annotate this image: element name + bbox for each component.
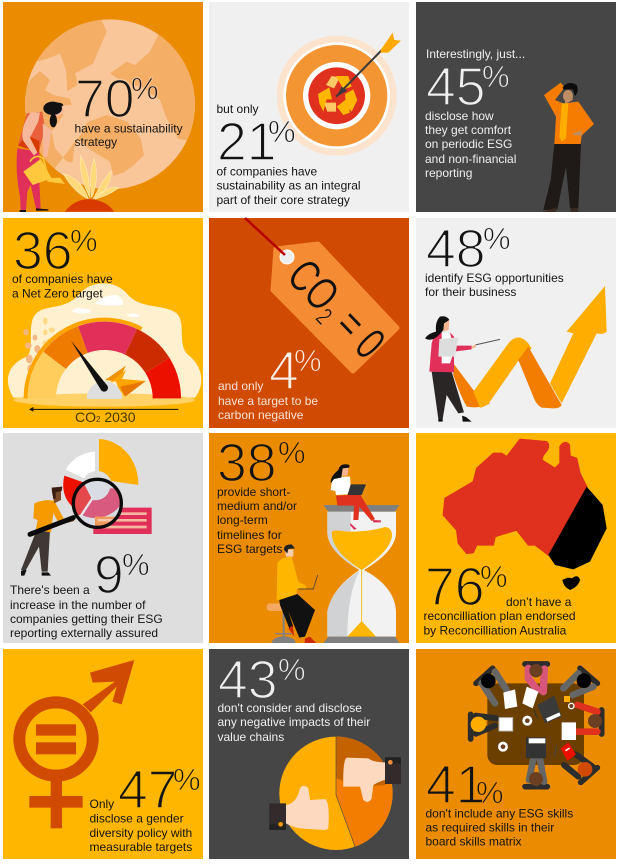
text: don't have a reconciliation plan endorsed: don’t have a <box>506 595 572 609</box>
text: ESG skills in board skills matrix: as required skills in their <box>426 820 554 834</box>
text: and only have a target to be carbon negative: and only <box>218 379 263 393</box>
illustration: globe <box>17 17 200 189</box>
panel: 41% board skills <box>416 649 616 859</box>
text: but only: but only <box>216 102 259 116</box>
stat: 9%: 9 <box>94 546 124 605</box>
text: timelines for ESG targets: medium and/or <box>217 499 297 513</box>
stat: 48%: 48 <box>426 220 486 279</box>
panel background <box>209 433 409 643</box>
stat: 21%: % <box>268 114 296 149</box>
stat: 76%: 76 <box>425 558 485 617</box>
text: of companies have sustainability as an integral part of their core strategy: sustainability as an integral <box>216 178 361 192</box>
panel: 38% timelines <box>209 433 409 643</box>
text: only disclose gender diversity policy: Only <box>90 797 114 811</box>
stat: 43%: 43 <box>218 651 278 710</box>
text: disclose how they get comfort: reporting <box>425 166 472 180</box>
panel: 21% core strategy <box>209 2 409 212</box>
stat: 48%: % <box>483 221 511 256</box>
text: disclose how they get comfort: disclose how <box>425 109 494 123</box>
text: ESG skills in board skills matrix: board skills matrix <box>426 834 522 848</box>
illustration: CO2 = 0 tag <box>245 218 397 371</box>
panel background <box>3 433 203 643</box>
stat: 4%: 4 <box>269 342 299 401</box>
panel background <box>209 218 409 428</box>
panel: 36% net zero target <box>3 218 203 428</box>
text: disclose how they get comfort: and non-financial <box>425 152 516 166</box>
text: only disclose gender diversity policy <box>90 797 192 854</box>
text: disclose how they get comfort: they get comfort <box>425 123 512 137</box>
text: timelines for ESG targets: timelines for <box>217 528 282 542</box>
icon: gender equality symbol <box>19 660 134 828</box>
stat: 21%: 21 <box>217 113 277 172</box>
panel background <box>416 2 616 212</box>
text: increase in companies getting assurance: There's been a <box>10 583 90 597</box>
illustration: CO2 gauge <box>8 283 201 412</box>
text: have a sustainability strategy: have a sustainability <box>74 122 183 136</box>
panel background <box>416 433 616 643</box>
illustration: target with recycle icon and arrow <box>277 33 401 156</box>
stat: 76%: % <box>480 559 508 594</box>
panel background <box>209 2 409 212</box>
stat: 4%: % <box>294 343 322 378</box>
text: of companies have a Net Zero target: a Net Zero target <box>12 286 103 300</box>
text: increase in companies getting assurance <box>10 583 163 640</box>
panel: 45% disclose comfort <box>416 2 616 212</box>
panel: 9% externally assured <box>3 433 203 643</box>
text: identify ESG opportunities: for their business <box>425 285 516 299</box>
text: and only have a target to be carbon negative: carbon negative <box>218 408 304 422</box>
text: increase in companies getting assurance: companies getting their ESG <box>10 612 163 626</box>
stat: 38%: % <box>278 435 306 470</box>
text: disclose how they get comfort <box>425 109 516 180</box>
panel: 43% negative impacts <box>209 649 409 859</box>
text: identify ESG opportunities: identify ESG opportunities <box>425 271 564 285</box>
label: CO2 2030: CO2 2030 <box>75 409 136 425</box>
text: negative impacts of value chains <box>218 701 370 744</box>
panel: 47% gender diversity <box>3 649 203 859</box>
text: negative impacts of value chains: value chains <box>218 730 284 744</box>
stat: 45%: 45 <box>426 58 486 117</box>
stat: 70%: 70 <box>75 70 135 129</box>
stat: 43% <box>218 651 306 710</box>
text: don't have a reconciliation plan endorsed: reconcilliation plan endorsed <box>424 609 576 623</box>
text: have a sustainability strategy <box>74 122 183 149</box>
text: of companies have a Net Zero target <box>12 272 113 300</box>
illustration: pie chart under magnifier with man <box>21 439 152 576</box>
text: negative impacts of value chains: don't consider and disclose <box>218 701 362 715</box>
stat: 38%: 38 <box>217 434 277 493</box>
panel background <box>3 218 203 428</box>
stat: 47%: % <box>173 762 201 797</box>
chart: pie with thumbs <box>279 737 401 850</box>
stat: 9% <box>94 546 150 605</box>
text: have a sustainability strategy: strategy <box>74 135 117 149</box>
text: increase in companies getting assurance: reporting externally assured <box>10 626 158 640</box>
text: timelines for ESG targets: long-term <box>217 513 268 527</box>
text: Interestingly, just...: Interestingly, just... <box>426 47 525 61</box>
stat: 47%: 47 <box>118 761 178 820</box>
stat: 38% <box>217 434 306 493</box>
text: and only have a target to be carbon negative <box>218 379 318 422</box>
illustration: rising arrow and presenter <box>425 286 607 422</box>
text: ESG skills in board skills matrix: don't include any ESG skills <box>426 806 573 820</box>
panel background <box>416 649 616 859</box>
stat: 43%: % <box>278 652 306 687</box>
text: don't have a reconciliation plan endorsed: by Reconcilliation Australia <box>424 624 567 638</box>
stat: 9%: % <box>122 547 150 582</box>
text: identify ESG opportunities <box>425 271 564 299</box>
icon: thumbs up <box>269 786 329 830</box>
stat: 45%: % <box>482 59 510 94</box>
text: timelines for ESG targets <box>217 485 297 556</box>
stat: 41%: % <box>476 775 504 810</box>
text: negative impacts of value chains: any negative impacts of their <box>218 715 370 729</box>
stat: 36%: % <box>70 223 98 258</box>
stat: 41%: 41 <box>426 756 486 815</box>
illustration: boardroom table seen from above <box>471 664 602 787</box>
illustration: CO2 = 0 tag: = 0 <box>319 293 394 369</box>
text: ESG skills in board skills matrix <box>426 806 573 848</box>
text: of companies have a Net Zero target: of companies have <box>12 272 113 286</box>
panel: 70% sustainability strategy <box>3 2 203 212</box>
stat: 70%: % <box>131 71 159 106</box>
panel: 4% carbon negative <box>209 218 409 428</box>
text: only disclose gender diversity policy: diversity policy with <box>90 826 192 840</box>
text: only disclose gender diversity policy: measurable targets <box>90 840 192 854</box>
panel background <box>209 649 409 859</box>
illustration: map of Australia <box>443 439 607 590</box>
panel: 76% reconciliation plan <box>416 433 616 643</box>
illustration: woman watering plant <box>17 102 119 212</box>
text: increase in companies getting assurance: increase in the number of <box>10 598 146 612</box>
panel background <box>3 2 203 212</box>
text: timelines for ESG targets: provide short- <box>217 485 290 499</box>
text: disclose how they get comfort: on periodic ESG <box>425 137 512 151</box>
stat: 4% <box>269 342 322 401</box>
text: don't have a reconciliation plan endorsed <box>424 595 576 638</box>
panel background <box>3 649 203 859</box>
stat: 36%: 36 <box>13 222 73 281</box>
text: only disclose gender diversity policy: disclose a gender <box>90 812 184 826</box>
illustration: CO2 = 0 tag: 2 <box>310 303 338 330</box>
illustration: CO2 = 0 tag: CO <box>278 250 348 321</box>
panel: 48% opportunities <box>416 218 616 428</box>
panel background <box>416 218 616 428</box>
text: and only have a target to be carbon negative: have a target to be <box>218 394 318 408</box>
text: of companies have sustainability as an integral part of their core strategy: of companies have <box>216 164 318 178</box>
text: of companies have sustainability as an integral part of their core strategy: part of their core strategy <box>216 193 350 207</box>
illustration: man scratching head <box>542 83 594 212</box>
text: of companies have sustainability as an integral part of their core strategy <box>216 164 361 207</box>
text: timelines for ESG targets: ESG targets <box>217 542 282 556</box>
illustration: hourglass with people <box>267 464 399 643</box>
